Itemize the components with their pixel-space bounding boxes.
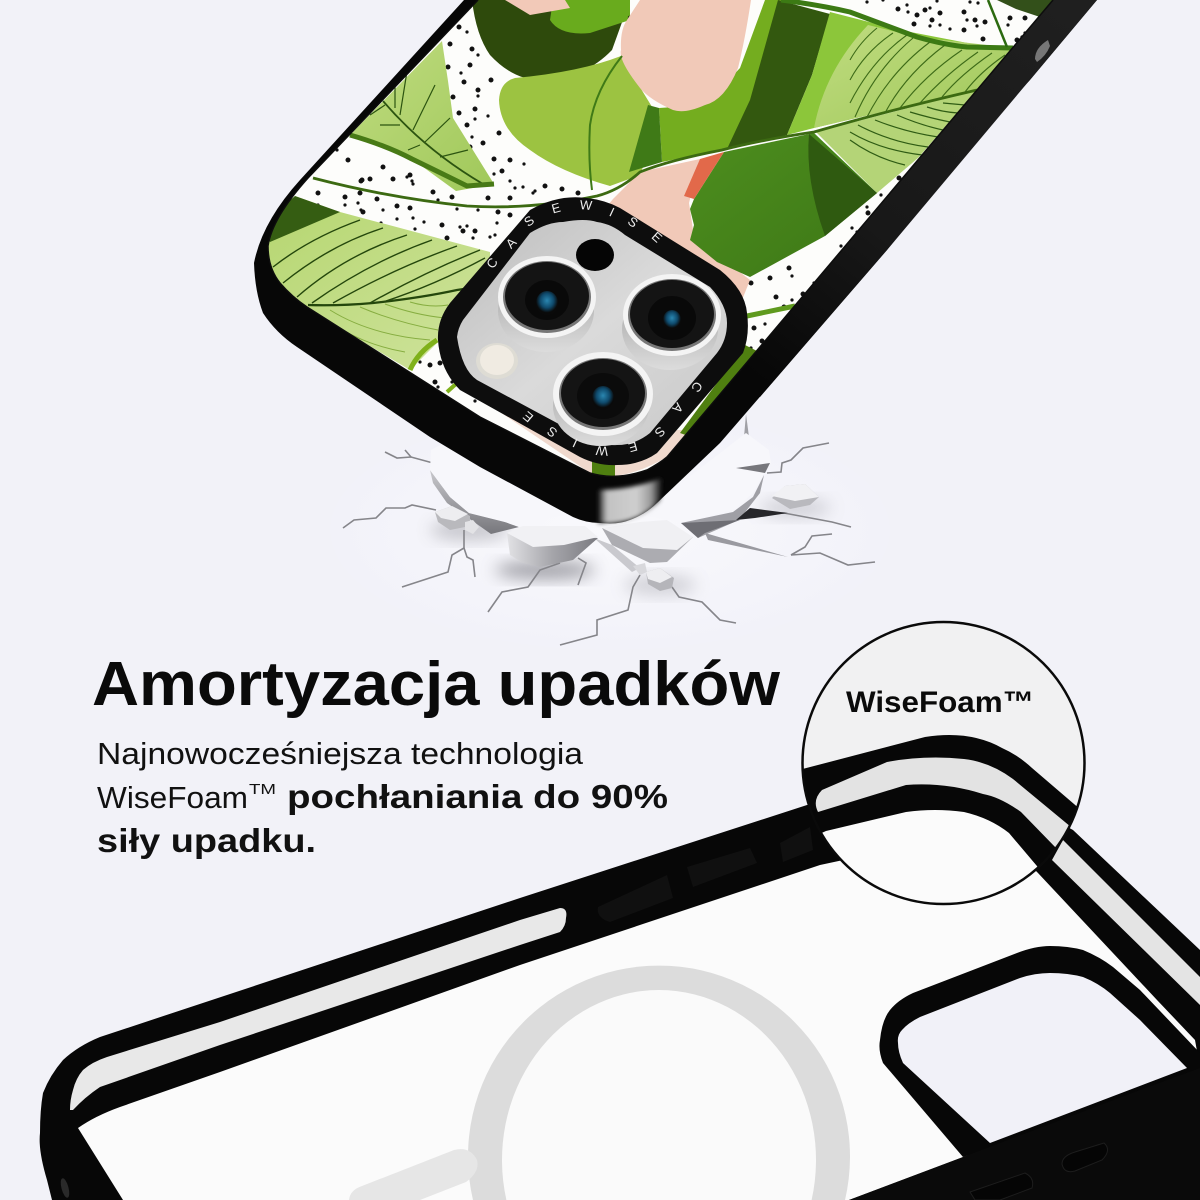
brand text on ring, bottom: W — [595, 443, 609, 459]
small bright stem — [447, 383, 457, 392]
lower small stems — [747, 306, 795, 316]
brand text on ring, top: A — [503, 234, 520, 251]
bright green stem — [410, 340, 437, 370]
MagSafe ring centre — [502, 990, 816, 1200]
case black bumper — [254, 0, 1097, 524]
long stem — [313, 90, 977, 207]
right plate wall — [681, 475, 764, 538]
bumper corner reflection — [598, 478, 662, 524]
description text: WiseFoam — [97, 780, 248, 815]
lower-right light leaf — [816, 90, 977, 193]
camera cutout window — [898, 973, 1187, 1143]
inner rim line — [268, 0, 1053, 476]
pink top fragment — [505, 0, 570, 15]
phone with case, top — [250, 0, 1100, 524]
description text: pochłaniania do 90% — [287, 778, 668, 815]
right small chunk — [772, 484, 819, 509]
bottom art pink strip — [497, 410, 690, 476]
brand text on ring, top: W — [579, 197, 593, 213]
gap between centre chunks — [594, 538, 640, 572]
printed art — [268, 0, 1052, 476]
brand text on ring, top: E — [550, 200, 562, 216]
darker leaf stripe — [808, 134, 877, 236]
description text — [97, 736, 668, 859]
cracked ground impact — [330, 410, 890, 650]
crack pebbles — [633, 563, 674, 591]
centre right chunk — [602, 520, 693, 563]
brand text on ring, top — [483, 197, 665, 271]
side strip, left — [70, 908, 566, 1110]
brand text on ring, bottom: S — [651, 424, 668, 441]
bright green lobe — [550, 0, 630, 33]
pink shape — [621, 0, 751, 111]
magnified foam strip — [816, 758, 1071, 849]
lens top-left — [498, 256, 596, 352]
brand text on ring, bottom: I — [570, 435, 580, 451]
lower dark green leaf — [690, 133, 877, 277]
clear window — [78, 835, 1200, 1200]
left small chunk — [435, 506, 479, 534]
dark stripe left — [629, 105, 662, 172]
right leaf veins — [850, 28, 1005, 117]
bottom clear case — [40, 775, 1200, 1200]
small dark leaf tip — [628, 16, 630, 19]
lower-left leaf — [260, 196, 490, 370]
lens bottom — [553, 352, 653, 446]
case black frame — [40, 775, 1200, 1200]
brand text on ring, top: S — [625, 213, 641, 231]
brand text on ring, bottom: C — [688, 379, 706, 395]
speckles, small — [318, 0, 1025, 401]
lens right — [622, 274, 721, 370]
right vivid green — [787, 12, 967, 135]
dark olive stripe — [727, 0, 830, 149]
camera ring — [438, 197, 748, 465]
right plate — [640, 433, 771, 522]
right bumper grey face — [720, 0, 1097, 397]
light green blob — [499, 56, 660, 186]
magnified frame — [795, 735, 1095, 872]
upper stem — [781, 0, 1013, 48]
brand text on ring, bottom: S — [544, 423, 560, 441]
MagSafe alignment pill — [349, 1149, 478, 1200]
lower pink shape — [610, 159, 750, 298]
brand text on ring, bottom: A — [669, 400, 686, 416]
upper-right light leaf — [814, 25, 1013, 128]
brand text on ring, bottom — [520, 379, 706, 459]
left plate — [430, 425, 600, 527]
crack dark details — [681, 463, 788, 557]
bottom port details — [970, 1143, 1108, 1200]
thin top-right stem and leaf — [988, 0, 1007, 47]
camera cutout — [879, 946, 1200, 1157]
centre left chunk — [507, 526, 598, 567]
description text: Najnowocześniejsza technologia — [97, 736, 584, 771]
bright green band — [659, 0, 790, 162]
speckles, large — [318, 9, 1025, 382]
lower-right leaf veins — [850, 103, 965, 165]
brand text on ring, top: I — [607, 204, 617, 220]
magnifier callout: WiseFoam — [790, 622, 1100, 920]
magnifier callout: WiseFoam: WiseFoam™ — [846, 686, 1034, 719]
upper-left leaf — [350, 41, 494, 191]
side strip, right — [1052, 840, 1200, 1005]
bottom edge band — [849, 1068, 1200, 1200]
left edge hole — [59, 1177, 71, 1199]
brand text on ring, top: S — [521, 212, 537, 230]
side buttons — [598, 827, 813, 922]
description text: siły upadku. — [97, 822, 316, 859]
orange accent — [684, 152, 724, 199]
lower-left leaf dark tip — [262, 196, 340, 242]
bottom green patch — [592, 455, 615, 478]
title: Amortyzacja upadków — [92, 650, 781, 719]
microphone hole — [576, 239, 614, 271]
brand text on ring, top: E — [649, 229, 665, 246]
brand text on ring, bottom: E — [627, 439, 639, 455]
magnified clear area — [790, 810, 1100, 920]
flash — [476, 343, 518, 379]
lower-left leaf veins — [273, 220, 490, 305]
brand text on ring, bottom: E — [520, 408, 536, 425]
dark green blob — [472, 0, 630, 80]
side button detail — [1035, 40, 1050, 62]
vertical stem — [589, 56, 622, 190]
MagSafe ring — [468, 966, 850, 1200]
description text: TM — [249, 781, 276, 798]
brand text on ring, top: C — [483, 255, 501, 271]
upper-left leaf veins — [370, 65, 483, 184]
camera plate — [457, 220, 727, 445]
right green strip — [680, 345, 775, 440]
left plate wall — [430, 470, 519, 534]
lower-left leaf light veins — [330, 302, 448, 352]
